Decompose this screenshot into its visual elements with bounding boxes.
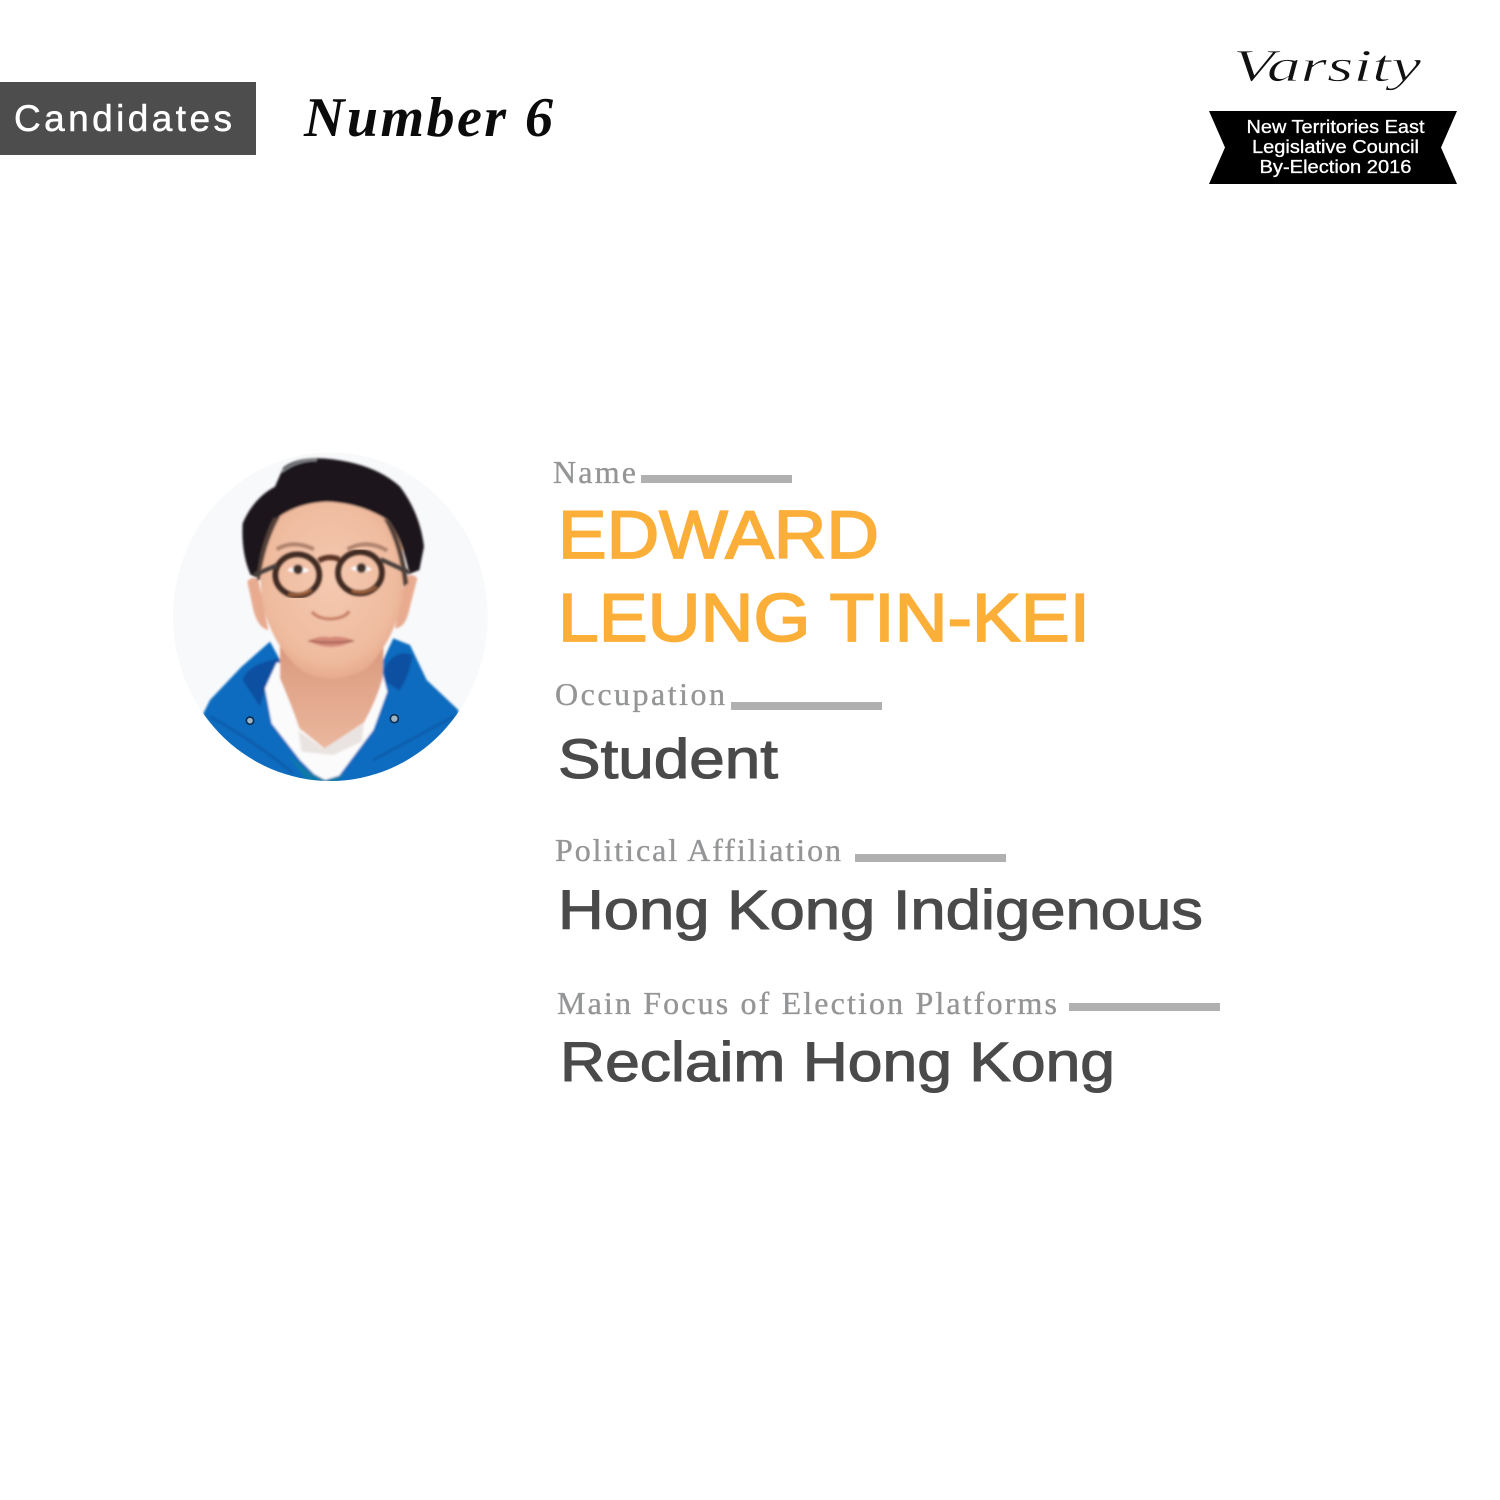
ribbon badge: Legislative Council [1252,137,1419,157]
ribbon badge [1209,111,1457,184]
field: main focus of election platforms [557,985,1220,1093]
field: name [553,454,1090,656]
section tag: Candidates [0,82,256,155]
field: main focus of election platforms: Reclaim Hong Kong [560,1030,1115,1093]
glasses [254,552,410,596]
face [258,500,403,678]
neck [280,633,384,748]
field: name: LEUNG TIN-KEI [558,580,1090,656]
section tag: Candidates: Candidates [14,98,232,139]
heading: Number 6: Number 6 [303,87,553,149]
eyes [287,565,372,573]
ribbon badge: By-Election 2016 [1260,157,1412,177]
field: occupation [555,676,882,790]
field: occupation: Occupation [555,676,725,712]
field: name: EDWARD [558,497,879,573]
nose [312,611,349,619]
field: political affiliation: Hong Kong Indigenous [558,878,1203,941]
field: name: Name [553,454,636,490]
hair [242,458,424,577]
portrait photo illustration [202,456,460,781]
field: occupation: Student [558,727,779,790]
field: political affiliation [555,832,1203,941]
ribbon badge: New Territories East [1246,117,1424,137]
field: main focus of election platforms: Main Focus of Election Platforms [557,985,1057,1021]
hoodie [193,638,460,790]
shirt [265,663,387,783]
hood eyelets [246,717,254,724]
field: political affiliation: Political Affiliation [555,832,841,868]
logo: Varsity: Varsity [1233,40,1422,91]
eyebrows [277,544,387,551]
ears [247,578,268,630]
mouth [308,637,354,647]
